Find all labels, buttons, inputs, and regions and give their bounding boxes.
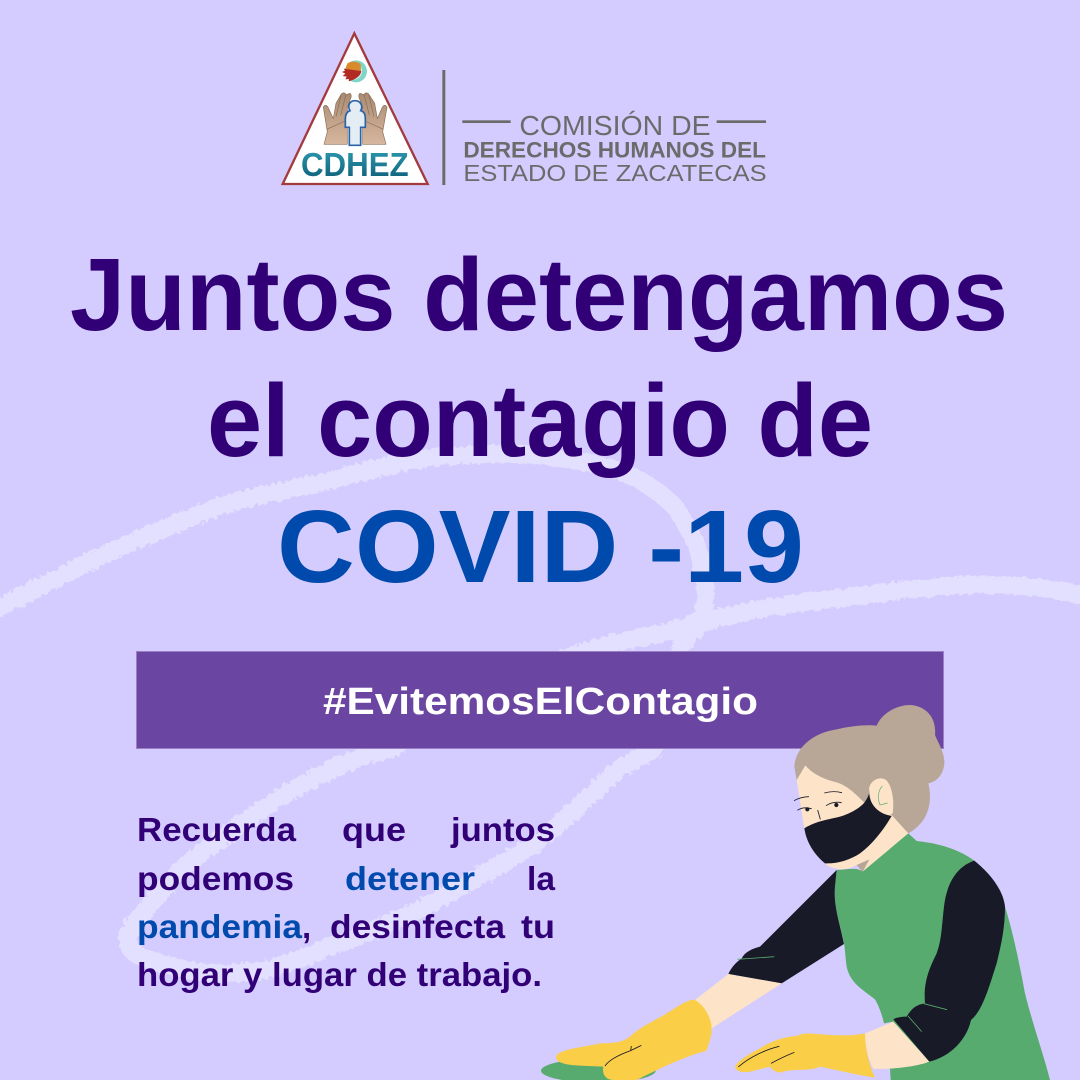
title line 1: Juntos detengamos (70, 237, 1008, 352)
logo hands (323, 93, 387, 144)
left sleeve (728, 870, 844, 983)
logo name text: ESTADO DE ZACATECAS (463, 160, 767, 186)
logo: CDHEZ (283, 33, 767, 186)
paragraph (137, 811, 556, 993)
logo person (345, 101, 365, 145)
logo side rules (462, 120, 766, 123)
paragraph: , (302, 908, 311, 945)
title line 3: COVID -19 (277, 489, 804, 604)
right forearm (865, 1022, 929, 1069)
title line 2: el contagio de (207, 363, 873, 478)
collar shadow (857, 859, 869, 872)
illustration: woman cleaning with mask and gloves (541, 705, 1050, 1080)
paragraph: detener (345, 860, 475, 897)
left forearm (695, 974, 782, 1028)
logo divider (442, 70, 445, 185)
paragraph: Recuerda (137, 811, 297, 848)
background brush swirl (0, 454, 1080, 974)
eyes and brows (794, 792, 842, 819)
paragraph: pandemia (137, 908, 303, 945)
right glove (735, 1033, 875, 1078)
face and neck (797, 765, 908, 872)
paragraph: podemos (137, 860, 294, 897)
paragraph: hogar y lugar de trabajo. (137, 956, 542, 993)
hashtag text: #EvitemosElContagio (323, 681, 758, 723)
logo sun emblem (342, 60, 367, 82)
face mask (804, 793, 892, 863)
paragraph: la (527, 860, 556, 897)
cleaning cloth (541, 1059, 656, 1080)
hashtag banner (136, 652, 944, 748)
ear (869, 778, 893, 815)
left glove (556, 1000, 712, 1080)
logo name text: COMISIÓN DE (519, 110, 711, 141)
paragraph: tu (521, 908, 555, 945)
logo name text: DERECHOS HUMANOS DEL (463, 137, 766, 162)
logo name text (463, 110, 767, 186)
right sleeve (893, 861, 1005, 1062)
paragraph: desinfecta (330, 908, 506, 945)
paragraph: que (342, 811, 406, 848)
green apron (835, 833, 1050, 1080)
paragraph: juntos (450, 811, 555, 848)
title (70, 237, 1008, 604)
hair (794, 705, 944, 833)
logo CDHEZ wordmark: CDHEZ (301, 146, 409, 183)
logo triangle (283, 33, 428, 184)
